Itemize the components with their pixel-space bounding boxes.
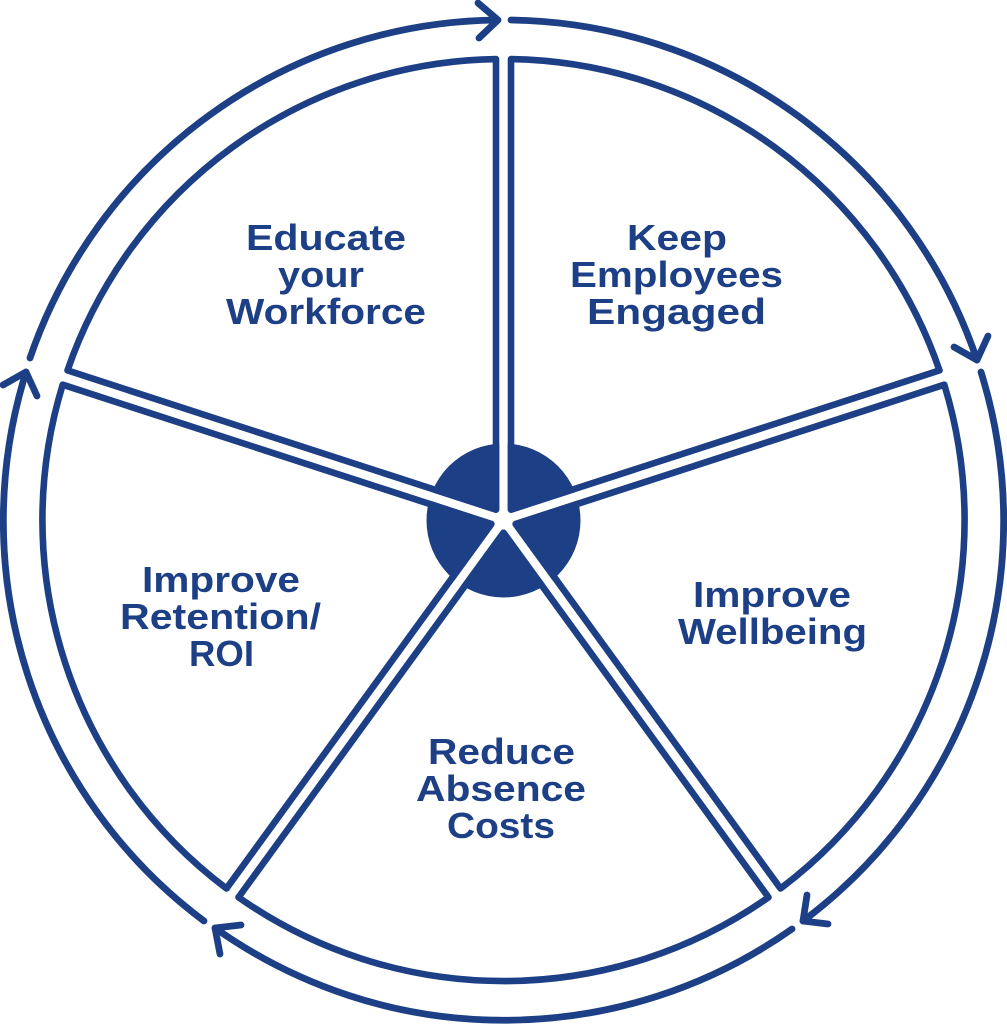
heading: Keep Employees Engaged [570,217,783,332]
heading: Improve Wellbeing: Wellbeing [678,611,867,652]
arrow: outer ring bottom left to left [3,372,204,921]
arrow: outer ring along the bottom [215,925,792,1020]
heading: Keep Employees Engaged: Engaged [587,291,766,332]
heading: Improve Wellbeing: Improve [693,574,851,615]
heading: Improve Retention/ROI: ROI [189,633,254,674]
heading: Educate your Workforce: your [278,254,364,295]
heading: Reduce Absence Costs: Absence [416,768,586,809]
heading: Improve Retention/ROI [120,559,321,674]
panel: Reduce Absence Costs [238,533,768,981]
heading: Keep Employees Engaged: Keep [627,217,727,258]
heading: Educate your Workforce: Workforce [226,291,426,332]
heading: Improve Wellbeing [678,574,867,652]
heading: Educate your Workforce: Educate [246,217,406,258]
heading: Educate your Workforce [226,217,426,332]
panel: Improve Retention/ROI [42,385,491,888]
heading: Improve Retention/ROI: Improve [142,559,300,600]
panel: Educate your Workforce [68,59,496,510]
central hub circle [426,444,580,598]
panel: Keep Employees Engaged [511,59,940,510]
heading: Keep Employees Engaged: Employees [570,254,783,295]
panel: Improve Wellbeing [516,385,965,888]
heading: Improve Retention/ROI: Retention/ [120,596,321,637]
arrow: outer ring right to bottom right [803,372,1004,924]
arrow: outer ring top to right [511,20,988,360]
heading: Reduce Absence Costs: Costs [447,805,555,846]
arrow: outer ring from Retention to Educate side [30,3,498,358]
heading: Reduce Absence Costs: Reduce [428,731,575,772]
heading: Reduce Absence Costs [416,731,586,846]
